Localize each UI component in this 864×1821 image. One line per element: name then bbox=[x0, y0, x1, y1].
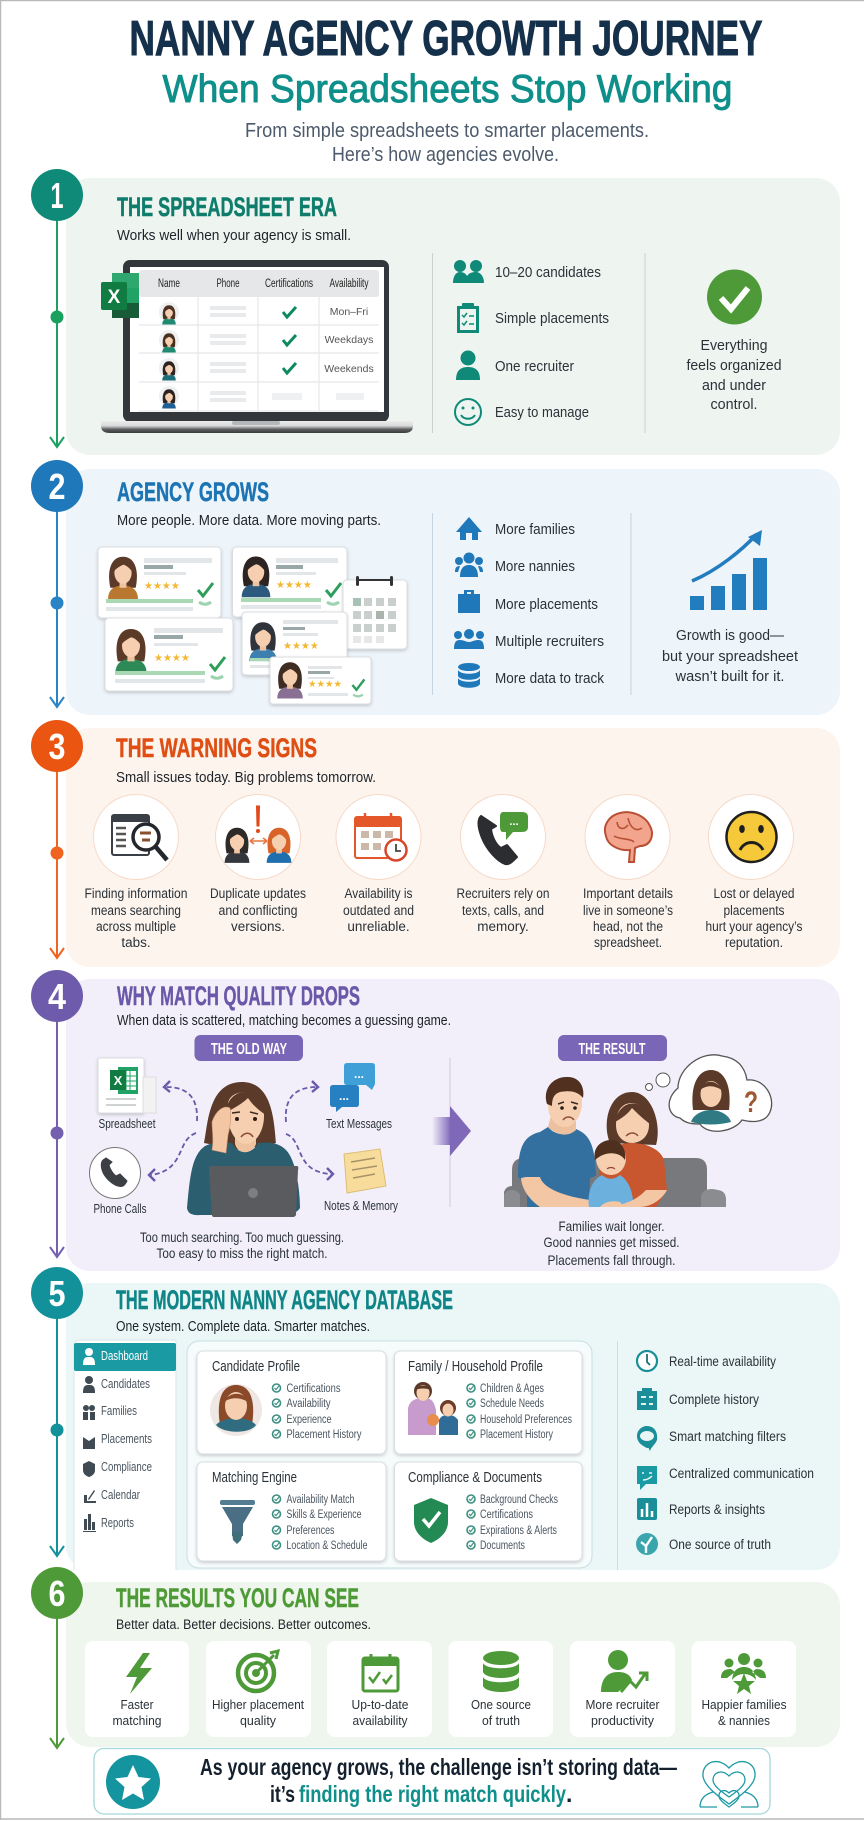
candidate cards: ★★★★ bbox=[308, 679, 343, 690]
subheading: When data is scattered, matching becomes a guessing game. bbox=[117, 1012, 451, 1029]
card: compliance and documents: Background Checks bbox=[480, 1494, 558, 1506]
warning sign captions bbox=[84, 886, 803, 950]
warning sign captions: memory. bbox=[477, 919, 529, 934]
sign: sad face bbox=[708, 794, 794, 880]
result: faster matching: Faster bbox=[120, 1697, 154, 1712]
card: compliance and documents: Compliance & Documents bbox=[408, 1470, 542, 1486]
warning sign captions: placements bbox=[724, 903, 785, 918]
card: family profile: Placement History bbox=[480, 1429, 553, 1441]
result: happier families: Happier families bbox=[702, 1697, 787, 1712]
warning sign captions: texts, calls, and bbox=[462, 903, 544, 918]
step marker 3 bbox=[31, 720, 83, 958]
caption: result: Families wait longer. bbox=[558, 1218, 664, 1234]
card: matching engine: Location & Schedule bbox=[286, 1540, 368, 1552]
pill: the result bbox=[558, 1035, 667, 1061]
card: compliance and documents bbox=[394, 1462, 582, 1561]
result: recruiter productivity: More recruiter bbox=[586, 1697, 660, 1712]
result: faster matching: matching bbox=[112, 1713, 162, 1728]
pill: the old way bbox=[194, 1035, 303, 1061]
card: candidate profile: Availability bbox=[286, 1398, 331, 1410]
result: placement quality: Higher placement bbox=[212, 1697, 304, 1712]
card: family profile: Family / Household Profile bbox=[408, 1359, 543, 1375]
step marker 6 bbox=[31, 1567, 83, 1748]
caption: old way: Too much searching. Too much guessing. bbox=[140, 1229, 344, 1245]
result: one source of truth: One source bbox=[471, 1697, 531, 1712]
label: spreadsheet: Spreadsheet bbox=[98, 1116, 156, 1131]
feature list: Easy to manage bbox=[495, 405, 589, 421]
warning sign captions: reputation. bbox=[725, 935, 783, 950]
card: compliance and documents: Certifications bbox=[480, 1509, 533, 1521]
warning sign captions: Recruiters rely on bbox=[456, 886, 550, 901]
step marker 2: 2 bbox=[48, 466, 66, 507]
warning sign captions: hurt your agency’s bbox=[706, 919, 803, 934]
label: phone calls: Phone Calls bbox=[94, 1201, 147, 1216]
callout: growth: Growth is good— bbox=[676, 627, 784, 644]
icon: spreadsheet: X bbox=[114, 1073, 123, 1088]
section 2: agency grows bbox=[31, 460, 840, 715]
result: happier families bbox=[692, 1641, 796, 1737]
feature list: More families bbox=[495, 522, 575, 538]
laptop with spreadsheet: Availability bbox=[330, 278, 369, 290]
candidate cards bbox=[98, 547, 407, 704]
card: compliance and documents: Expirations & Alerts bbox=[480, 1525, 557, 1537]
feature list bbox=[454, 517, 605, 688]
section 3: warning signs bbox=[31, 720, 840, 967]
step marker 2 bbox=[31, 460, 83, 707]
card: candidate profile: Placement History bbox=[286, 1429, 362, 1441]
feature list: One recruiter bbox=[495, 359, 574, 375]
benefits list: Complete history bbox=[669, 1392, 759, 1407]
heading: WHY MATCH QUALITY DROPS bbox=[117, 981, 360, 1011]
step marker 5: 5 bbox=[48, 1273, 66, 1314]
subheading: Works well when your agency is small. bbox=[117, 227, 351, 244]
card: family profile bbox=[394, 1351, 582, 1454]
feature list: Multiple recruiters bbox=[495, 634, 604, 650]
benefits list bbox=[636, 1351, 814, 1555]
icon: text messages: ... bbox=[354, 1067, 364, 1081]
heading: THE RESULTS YOU CAN SEE bbox=[116, 1583, 359, 1613]
result: placement quality bbox=[206, 1641, 311, 1737]
card: matching engine: Preferences bbox=[286, 1525, 335, 1537]
benefits list: Real-time availability bbox=[669, 1354, 776, 1369]
dashed arrows bbox=[149, 1081, 333, 1181]
laptop with spreadsheet: Name bbox=[158, 278, 180, 290]
card: matching engine: Skills & Experience bbox=[286, 1509, 362, 1521]
callout: under control: feels organized bbox=[686, 357, 782, 374]
candidate cards: ★★★★ bbox=[276, 580, 312, 591]
feature list: More nannies bbox=[495, 559, 575, 575]
subheading: Better data. Better decisions. Better outcomes. bbox=[116, 1617, 371, 1632]
sidebar navigation: Compliance bbox=[101, 1460, 152, 1474]
laptop with spreadsheet: Weekends bbox=[324, 363, 374, 375]
closing callout bbox=[94, 1748, 770, 1814]
feature list: More placements bbox=[495, 597, 598, 613]
caption: result: Placements fall through. bbox=[548, 1252, 676, 1268]
pill: the result: THE RESULT bbox=[578, 1041, 646, 1058]
warning sign captions: Availability is bbox=[344, 886, 413, 901]
card: family profile: Household Preferences bbox=[480, 1414, 572, 1426]
growth chart bbox=[690, 530, 767, 610]
tagline: From simple spreadsheets to smarter placements. bbox=[245, 120, 649, 142]
sidebar navigation: Families bbox=[101, 1404, 137, 1418]
result: up-to-date availability bbox=[327, 1641, 432, 1737]
icon: text messages bbox=[330, 1063, 375, 1112]
step marker 4 bbox=[31, 970, 83, 1257]
icon: notes bbox=[344, 1149, 386, 1193]
benefits list: Smart matching filters bbox=[669, 1429, 786, 1444]
callout: under control: control. bbox=[710, 396, 758, 413]
sidebar navigation: Candidates bbox=[101, 1377, 150, 1391]
candidate cards: ★★★★ bbox=[144, 581, 180, 592]
warning sign captions: means searching bbox=[91, 903, 181, 918]
candidate cards: ★★★★ bbox=[154, 653, 190, 664]
thought bubble: ? bbox=[744, 1086, 758, 1119]
dashboard container bbox=[187, 1341, 592, 1568]
label: notes: Notes & Memory bbox=[324, 1198, 398, 1213]
feature list bbox=[453, 260, 609, 425]
step marker 1: 1 bbox=[50, 175, 64, 216]
sign: searching tabs bbox=[94, 794, 178, 880]
caption: old way bbox=[140, 1229, 344, 1261]
sign: phone and texts: ... bbox=[509, 816, 519, 828]
section 1: the spreadsheet era bbox=[31, 169, 840, 455]
pill: the old way: THE OLD WAY bbox=[211, 1041, 287, 1058]
icon: excel bbox=[101, 273, 139, 318]
laptop with spreadsheet bbox=[101, 260, 413, 433]
label: text messages: Text Messages bbox=[326, 1116, 392, 1131]
sidebar navigation bbox=[74, 1340, 176, 1570]
result: up-to-date availability: Up-to-date bbox=[352, 1697, 408, 1712]
warning sign captions: versions. bbox=[231, 919, 285, 934]
tagline bbox=[245, 120, 649, 166]
arrow: old way to result bbox=[432, 1106, 471, 1156]
result: one source of truth bbox=[448, 1641, 553, 1737]
card: matching engine bbox=[197, 1462, 386, 1561]
icon: star badge bbox=[106, 1755, 160, 1809]
result: happier families: & nannies bbox=[718, 1713, 770, 1728]
sidebar navigation: Calendar bbox=[101, 1488, 140, 1502]
result: placement quality: quality bbox=[240, 1713, 276, 1728]
result: recruiter productivity bbox=[570, 1641, 675, 1737]
step marker 3: 3 bbox=[48, 726, 66, 767]
card: matching engine: Matching Engine bbox=[212, 1470, 297, 1486]
result: up-to-date availability: availability bbox=[352, 1713, 408, 1728]
card: candidate profile: Experience bbox=[286, 1414, 332, 1426]
laptop with spreadsheet: Certifications bbox=[265, 278, 313, 290]
benefits list: Reports & insights bbox=[669, 1502, 765, 1517]
card: matching engine: Availability Match bbox=[286, 1494, 354, 1506]
card: family profile: Children & Ages bbox=[480, 1383, 544, 1395]
card: candidate profile: Certifications bbox=[286, 1383, 341, 1395]
warning sign captions: Lost or delayed bbox=[714, 886, 794, 901]
feature list: 10–20 candidates bbox=[495, 265, 601, 281]
sidebar navigation: Reports bbox=[101, 1516, 134, 1530]
warning sign captions: and conflicting bbox=[218, 903, 298, 918]
sign: brain bbox=[585, 794, 670, 880]
caption: result: Good nannies get missed. bbox=[544, 1234, 680, 1250]
illustration: stressed recruiter bbox=[187, 1082, 300, 1217]
icon: spreadsheet bbox=[98, 1058, 156, 1113]
step marker 5 bbox=[31, 1267, 83, 1556]
closing message bbox=[200, 1754, 677, 1807]
icon: hearts and people bbox=[700, 1762, 758, 1807]
step marker 4: 4 bbox=[48, 976, 66, 1017]
step marker 1 bbox=[31, 169, 83, 447]
caption: result bbox=[544, 1218, 680, 1268]
icon: phone bbox=[90, 1148, 140, 1198]
warning sign captions: live in someone’s bbox=[583, 903, 673, 918]
section 4: why match quality drops bbox=[31, 970, 840, 1271]
benefits list: One source of truth bbox=[669, 1537, 771, 1552]
callout: under control bbox=[686, 270, 782, 413]
card: candidate profile: Candidate Profile bbox=[212, 1359, 300, 1375]
warning sign captions: unreliable. bbox=[347, 919, 410, 934]
section 5: modern database bbox=[31, 1267, 840, 1570]
card: family profile: Schedule Needs bbox=[480, 1398, 544, 1410]
warning sign captions: Important details bbox=[583, 886, 673, 901]
closing message: As your agency grows, the challenge isn’t storing data— bbox=[200, 1754, 677, 1780]
closing message: it’s bbox=[270, 1781, 295, 1807]
heading: AGENCY GROWS bbox=[117, 477, 269, 507]
icon: excel: X bbox=[108, 287, 121, 308]
closing message: . bbox=[566, 1781, 572, 1807]
callout: growth bbox=[662, 627, 799, 685]
step marker 6: 6 bbox=[48, 1573, 66, 1614]
warning sign captions: Finding information bbox=[84, 886, 188, 901]
subtitle: When Spreadsheets Stop Working bbox=[162, 68, 732, 111]
callout: under control: and under bbox=[702, 377, 766, 394]
callout: under control: Everything bbox=[700, 337, 768, 354]
laptop with spreadsheet: Mon–Fri bbox=[330, 306, 368, 318]
laptop with spreadsheet: Phone bbox=[216, 278, 240, 290]
closing message: finding the right match quickly bbox=[299, 1781, 566, 1807]
tagline: Here’s how agencies evolve. bbox=[332, 144, 559, 166]
illustration: worried family bbox=[504, 1077, 726, 1207]
card: candidate profile bbox=[197, 1351, 386, 1454]
result: one source of truth: of truth bbox=[482, 1713, 520, 1728]
candidate cards: ★★★★ bbox=[283, 641, 319, 652]
subheading: More people. More data. More moving parts. bbox=[117, 512, 381, 529]
warning sign captions: outdated and bbox=[343, 903, 414, 918]
benefits list: Centralized communication bbox=[669, 1466, 814, 1481]
title block bbox=[130, 12, 762, 166]
icon: text messages: ... bbox=[339, 1089, 349, 1103]
sidebar navigation: Placements bbox=[101, 1432, 152, 1446]
card: compliance and documents: Documents bbox=[480, 1540, 525, 1552]
laptop with spreadsheet: Weekdays bbox=[325, 334, 373, 346]
sign: duplicate updates bbox=[216, 794, 300, 880]
warning sign captions: tabs. bbox=[121, 935, 151, 950]
heading: THE MODERN NANNY AGENCY DATABASE bbox=[116, 1285, 453, 1315]
heading: THE SPREADSHEET ERA bbox=[117, 192, 337, 222]
feature list: More data to track bbox=[495, 671, 605, 687]
sign: outdated calendar bbox=[336, 794, 421, 880]
subheading: Small issues today. Big problems tomorrow. bbox=[116, 769, 376, 786]
result: faster matching bbox=[85, 1641, 189, 1737]
feature list: Simple placements bbox=[495, 311, 609, 327]
caption: old way: Too easy to miss the right match. bbox=[156, 1245, 328, 1261]
sidebar navigation: Dashboard bbox=[101, 1349, 148, 1363]
warning sign captions: Duplicate updates bbox=[210, 886, 306, 901]
heading: THE WARNING SIGNS bbox=[116, 733, 317, 763]
thought bubble bbox=[646, 1055, 772, 1131]
subheading: One system. Complete data. Smarter matches. bbox=[116, 1318, 370, 1335]
warning sign captions: spreadsheet. bbox=[594, 935, 662, 950]
result: recruiter productivity: productivity bbox=[591, 1713, 654, 1728]
callout: growth: but your spreadsheet bbox=[662, 648, 799, 665]
sign: phone and texts bbox=[460, 794, 546, 880]
section 6: results bbox=[31, 1567, 840, 1748]
warning sign captions: across multiple bbox=[96, 919, 176, 934]
warning sign captions: head, not the bbox=[593, 919, 663, 934]
callout: growth: wasn’t built for it. bbox=[675, 668, 784, 685]
